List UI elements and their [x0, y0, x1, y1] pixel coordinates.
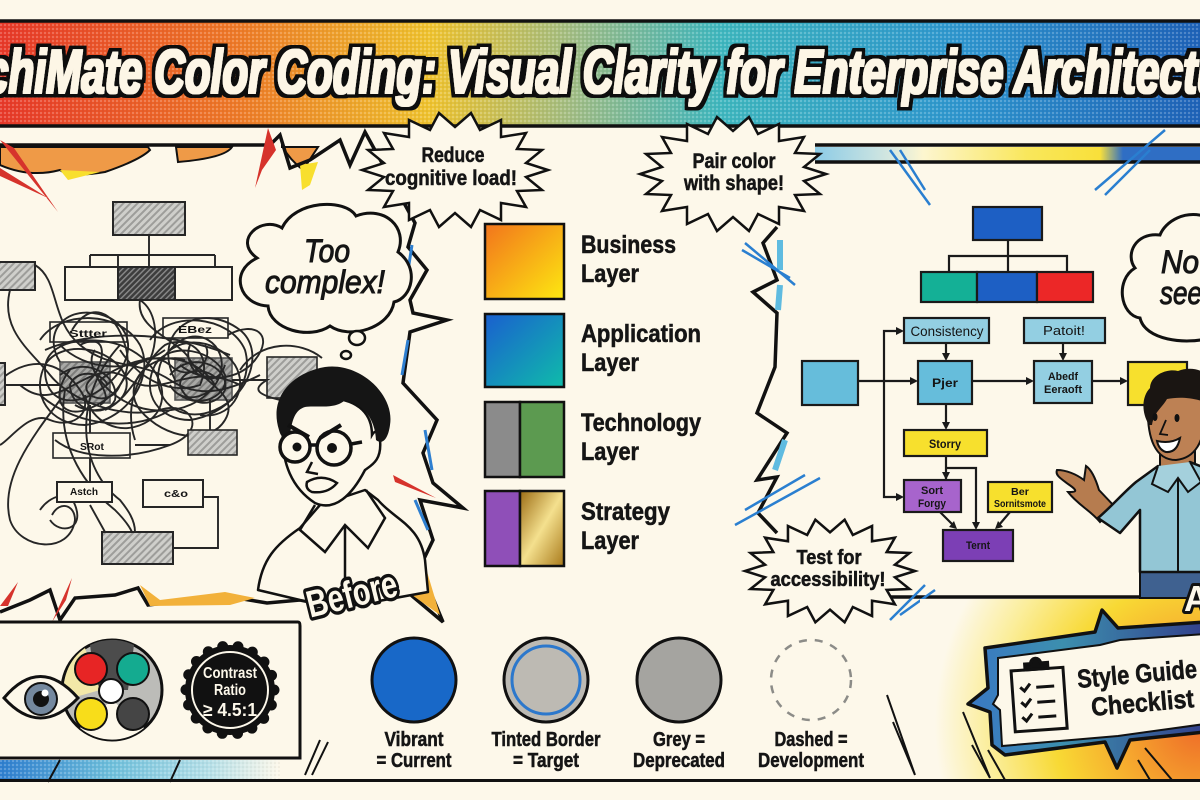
character: smiling man	[1057, 369, 1200, 598]
text line two: accessibility!	[770, 569, 886, 591]
box: far left	[0, 363, 5, 405]
badge: contrast ratio: ≥ 4.5:1	[203, 700, 257, 720]
box: label one	[50, 322, 127, 342]
circle: grey	[637, 638, 721, 722]
box: label three	[53, 433, 130, 458]
label: vibrant current: = Current	[376, 750, 452, 772]
swatch: business	[485, 224, 564, 299]
bottom band	[925, 599, 1075, 613]
box: ber: Sornitsmote	[994, 499, 1046, 510]
swatch: strategy	[485, 491, 564, 566]
shirt	[258, 490, 428, 608]
box: middle row	[65, 267, 232, 300]
box: label four	[57, 482, 112, 502]
text line one: Reduce	[422, 144, 484, 167]
legend: status circles	[372, 638, 864, 772]
box: ber: Ber	[1011, 487, 1029, 498]
cloud	[1122, 215, 1200, 341]
colour wheel	[62, 640, 162, 740]
label: tinted border target	[492, 729, 601, 772]
label: strategy layer: Strategy	[581, 498, 670, 526]
box: story: Storry	[929, 437, 961, 451]
box: label five: c&o	[164, 489, 188, 500]
swatch: application	[485, 314, 564, 387]
box: right grey	[175, 358, 232, 400]
box: top grey	[113, 202, 185, 235]
box: consistency: Consistency	[910, 323, 984, 339]
label: grey deprecated: Grey =	[653, 729, 705, 751]
label: dashed development	[758, 729, 864, 772]
label: strategy layer: Layer	[581, 527, 639, 555]
right edge color flecks	[402, 245, 432, 530]
burst	[745, 520, 915, 622]
arrowheads	[896, 327, 1128, 530]
callout: reduce cognitive load	[362, 113, 548, 227]
jeans	[1140, 570, 1200, 598]
box: label five	[143, 480, 203, 507]
face	[1148, 385, 1200, 460]
blue speed lines	[735, 130, 1165, 620]
smile	[1157, 438, 1180, 452]
label: tinted border target: = Target	[513, 750, 579, 772]
label: technology layer: Layer	[581, 438, 639, 466]
brows	[288, 425, 341, 438]
box: abedf	[1034, 361, 1092, 403]
collar and placket	[1152, 462, 1200, 572]
thought bubble: too complex	[240, 204, 411, 359]
circle: dashed	[771, 640, 851, 720]
nose	[1160, 420, 1168, 435]
box: patoit: Patoit!	[1043, 323, 1085, 338]
black speed lines	[48, 695, 1172, 782]
top band	[815, 147, 1200, 162]
text too: Too	[304, 233, 350, 269]
blue flecks	[775, 240, 785, 470]
text line two: cognitive load!	[385, 167, 517, 190]
icon: eye	[4, 676, 78, 718]
box: left grey	[0, 262, 35, 290]
box: abedf: Eeraoft	[1044, 384, 1082, 396]
box: patoit	[1024, 318, 1105, 343]
label: business layer	[581, 231, 676, 288]
text line one: Test for	[796, 547, 862, 569]
box: sort	[904, 480, 961, 512]
glasses	[280, 431, 362, 465]
text complex: complex!	[265, 264, 385, 300]
callout: pair color with shape	[640, 117, 826, 231]
red speed lines	[0, 128, 436, 622]
label: before: Before	[302, 563, 402, 627]
bottom frame colors	[140, 565, 440, 615]
face	[283, 398, 380, 505]
hand	[1057, 466, 1115, 522]
bottom rule and corner bands	[0, 599, 1200, 782]
box: label two	[163, 318, 228, 338]
box: label three: SRot	[80, 442, 105, 453]
label: application layer	[581, 320, 701, 377]
callout: test for accessibility	[745, 520, 915, 622]
box: fort	[943, 530, 1013, 561]
nose and mouth	[307, 462, 337, 492]
text line two: with shape!	[683, 172, 784, 195]
eyes	[1152, 413, 1180, 422]
box: sort: Sort	[921, 485, 943, 497]
box: small grey	[188, 430, 237, 455]
eyes	[292, 442, 337, 453]
panel: contrast box	[0, 622, 300, 758]
collar	[300, 490, 385, 590]
box: label one: Sttter	[69, 329, 107, 340]
badge: contrast ratio: Contrast	[203, 665, 258, 682]
box: abedf: Abedf	[1048, 371, 1078, 383]
box: consistency	[904, 318, 989, 343]
text line one: Pair color	[692, 150, 776, 173]
swatch: technology	[485, 402, 564, 477]
box: pjer: Pjer	[932, 376, 958, 390]
box: label four: Astch	[70, 487, 98, 498]
cloud	[240, 204, 411, 332]
row: three colour boxes	[921, 272, 1093, 302]
label: grey deprecated: Deprecated	[633, 750, 725, 772]
circle: tinted border	[504, 638, 588, 722]
box: far right grey	[267, 357, 317, 398]
box: left blue	[802, 361, 858, 405]
label: business layer: Layer	[581, 260, 639, 288]
box outline	[0, 622, 300, 758]
connectors	[858, 240, 1124, 525]
label: grey deprecated	[633, 729, 725, 772]
panel: after, comic frame	[735, 130, 1200, 620]
tangled connector lines	[0, 235, 322, 548]
burst	[640, 117, 826, 231]
badge: contrast ratio	[185, 645, 275, 735]
label: technology layer	[581, 409, 701, 466]
badge: contrast ratio: Ratio	[214, 682, 246, 699]
title banner	[0, 21, 1200, 126]
panel: style guide checklist badge	[968, 610, 1200, 768]
label: dashed development: Dashed =	[774, 729, 848, 751]
hair	[1143, 369, 1200, 425]
flowchart: clean after diagram	[802, 207, 1187, 561]
box: top blue	[973, 207, 1042, 240]
frame lines	[753, 145, 1200, 597]
label: technology layer: Technology	[581, 409, 701, 437]
hair	[276, 366, 390, 442]
box: ber	[988, 482, 1052, 512]
box: label two: EBez	[178, 325, 212, 336]
label: vibrant current: Vibrant	[384, 729, 444, 751]
legend: layer swatches	[485, 224, 701, 566]
label: application layer: Application	[581, 320, 701, 348]
box: central grey	[60, 362, 110, 403]
flowchart: tangled before diagram	[0, 202, 322, 564]
thought bubble: right	[1122, 215, 1200, 341]
label: application layer: Layer	[581, 349, 639, 377]
label: tinted border target: Tinted Border	[492, 729, 601, 751]
icon: clipboard	[1010, 656, 1067, 732]
frame	[968, 610, 1200, 768]
burst	[362, 113, 548, 227]
top frame band	[0, 146, 318, 175]
box: yellow right	[1128, 362, 1187, 405]
circle: vibrant	[372, 638, 456, 722]
panel: before, comic frame	[0, 128, 463, 622]
label: dashed development: Development	[758, 750, 864, 772]
box: story	[904, 430, 987, 456]
shirt	[1098, 462, 1200, 572]
label: vibrant current	[376, 729, 452, 772]
inner card	[993, 634, 1200, 746]
label: strategy layer	[581, 498, 670, 555]
label: business layer: Business	[581, 231, 676, 259]
box: sort: Forgy	[918, 498, 947, 510]
box: pjer	[918, 361, 972, 404]
box: bottom grey	[102, 532, 173, 564]
thought dots	[341, 331, 365, 359]
frame outline	[0, 132, 463, 622]
box: fort: Ternt	[966, 540, 990, 552]
neck	[1160, 450, 1195, 488]
character: frustrated man	[258, 366, 428, 608]
